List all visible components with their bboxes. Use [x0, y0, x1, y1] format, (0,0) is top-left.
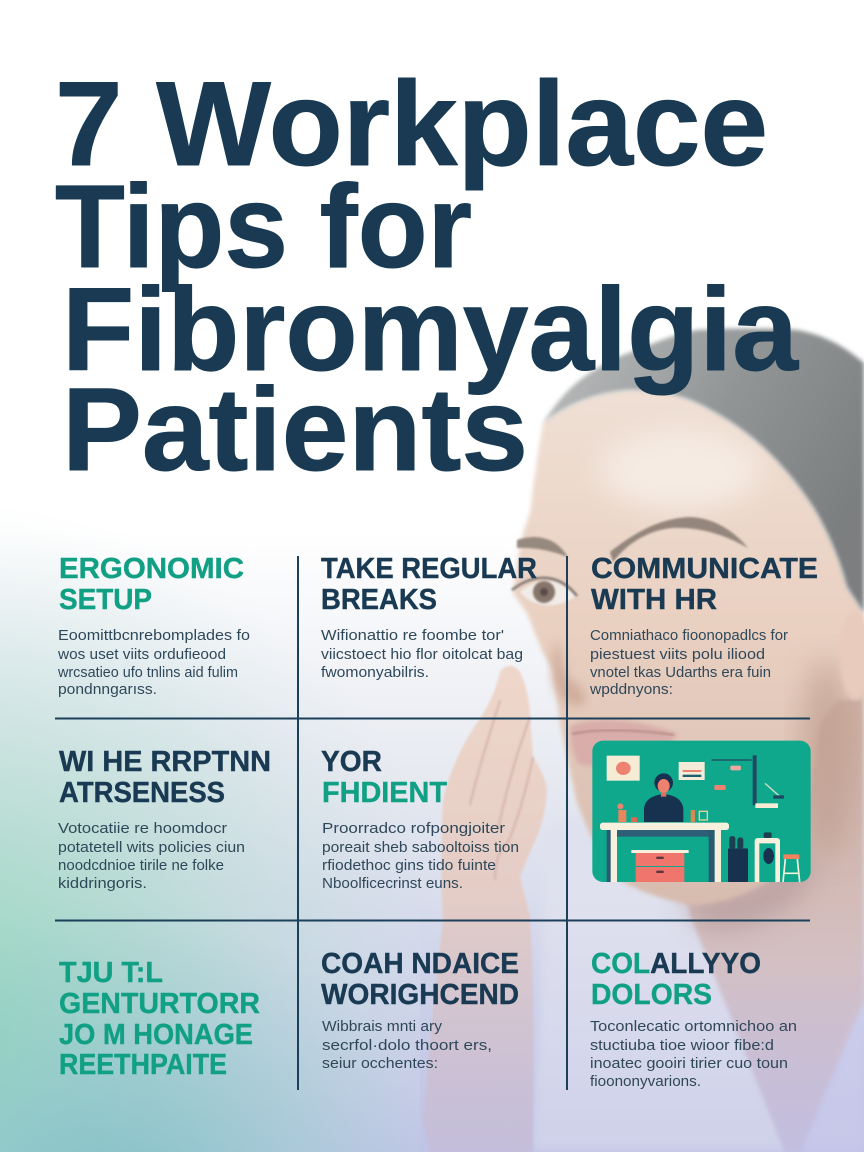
panel: ergonomic setup: [57, 553, 250, 698]
heading: DOLORS: [591, 979, 712, 1011]
title: [55, 57, 799, 496]
heading: COLALLYYO: [591, 948, 761, 980]
neck shadow: [680, 850, 815, 928]
body text: potatetell wits policies ciun: [58, 839, 245, 856]
title: 7 Workplace: [55, 57, 768, 191]
title: Tips for: [55, 161, 472, 293]
panel: take regular breaks: [321, 553, 537, 681]
panel: colallyyo dolors: [590, 948, 797, 1090]
title: Fibromyalgia: [62, 264, 799, 396]
body text: stuctiuba tioe wioor fibe:d: [590, 1037, 774, 1054]
body text: poreait sheb sabooltoiss tion: [322, 839, 519, 856]
heading: [59, 553, 244, 616]
eye: [512, 578, 577, 605]
heading: JO M HONAGE: [59, 1019, 253, 1051]
heading: [59, 746, 271, 809]
body text: piestuest viits polu iliood: [590, 646, 765, 663]
wall chart: [679, 762, 705, 780]
heading: [591, 948, 761, 1011]
body text: fioononyvarions.: [590, 1073, 701, 1090]
panel: tju til genturtorr: [59, 957, 260, 1081]
body text: Comniathaco fioonopadlcs for: [590, 627, 788, 644]
forehead highlight: [600, 430, 760, 510]
body text: fwomonyabilris.: [321, 664, 429, 681]
heading: TJU T:L: [59, 957, 163, 989]
body text: wpddnyons:: [589, 681, 673, 698]
body text: [321, 627, 523, 681]
body text: Nboolficecrinst euns.: [322, 875, 463, 892]
hair: [543, 328, 864, 613]
dark cabinet: [728, 836, 748, 882]
lips: [570, 720, 678, 766]
white shelf unit: [755, 832, 780, 882]
body text: rfiodethoc gins tido fuinte: [322, 857, 496, 874]
heading: WI HE RRPTNN: [59, 746, 271, 778]
body text: [589, 627, 788, 698]
heading: BREAKS: [321, 584, 437, 616]
body text: [57, 627, 250, 698]
heading: COMMUNICATE: [591, 553, 818, 585]
body text: wrcsatieo ufo tnlins aid fulim: [57, 664, 238, 681]
face: [513, 390, 864, 905]
panel: communicate with hr: [589, 553, 818, 698]
body text: Wifionattio re foombe tor': [321, 627, 504, 644]
body text: viicstoect hio flor oitolcat bag: [321, 646, 523, 663]
title: Patients: [62, 364, 528, 496]
body text: Votocatiie re hoomdocr: [58, 820, 227, 837]
wall poster: [607, 756, 640, 781]
shelf and small items: [712, 755, 784, 808]
heading: WORIGHCEND: [321, 979, 519, 1011]
jaw shading: [800, 660, 852, 860]
portrait photo of woman holding her face: [420, 328, 864, 1152]
body text: [58, 820, 245, 892]
heading: [59, 957, 260, 1081]
body text: noodcdnioe tirile ne folke: [58, 857, 224, 874]
body text: wos uset viits ordufieood: [57, 646, 226, 663]
desk: [600, 823, 729, 882]
body text: Toconlecatic ortomnichoo an: [590, 1018, 797, 1035]
body text: [590, 1018, 797, 1090]
eyebrow left: [517, 537, 568, 557]
body text: inoatec gooiri tirier cuo toun: [590, 1055, 788, 1072]
heading: SETUP: [59, 584, 152, 616]
illustration: office desk scene: [592, 741, 811, 882]
neck and chest: [680, 680, 864, 1152]
heading: WITH HR: [591, 584, 717, 616]
grid divider lines: [55, 556, 810, 1090]
body text: secrfol·dolo thoort ers,: [322, 1037, 492, 1054]
body text: vnotel tkas Udarths era fuin: [590, 664, 771, 681]
heading: TAKE REGULAR: [321, 553, 537, 585]
panel: yor fhdient: [321, 746, 519, 892]
body text: Eoomittbcnrebomplades fo: [58, 627, 250, 644]
desk items: [617, 803, 707, 822]
heading: [321, 746, 447, 809]
heading: [321, 948, 519, 1011]
arm and hand: [423, 666, 547, 1152]
body text: [322, 820, 519, 892]
shirt: [530, 815, 790, 1152]
heading: [591, 553, 818, 616]
body text: seiur occhentes:: [322, 1055, 438, 1072]
panel: wi he rrptnn atrseness: [58, 746, 271, 892]
body text: Wibbrais mnti ary: [322, 1018, 443, 1035]
lower fade overlay: [420, 900, 864, 1152]
panel: coah ndaice worighcend: [321, 948, 519, 1072]
heading: REETHPAITE: [59, 1049, 227, 1081]
heading: GENTURTORR: [59, 988, 260, 1020]
body text: pondnngarıss.: [58, 681, 157, 698]
body text: kiddringoris.: [58, 875, 147, 892]
person at desk: [644, 773, 683, 822]
body text: Proorradco rofpongjoiter: [322, 820, 505, 837]
nose shadow: [552, 640, 586, 706]
heading: ATRSENESS: [59, 777, 225, 809]
heading: FHDIENT: [322, 777, 447, 809]
finger creases: [470, 700, 533, 880]
heading: YOR: [321, 746, 382, 778]
heading: [321, 553, 537, 616]
heading: COAH NDAICE: [321, 948, 519, 980]
body text: [322, 1018, 492, 1072]
stool: [783, 854, 800, 882]
ear: [840, 611, 864, 699]
heading: ERGONOMIC: [59, 553, 244, 585]
eyebrow right: [610, 517, 748, 562]
